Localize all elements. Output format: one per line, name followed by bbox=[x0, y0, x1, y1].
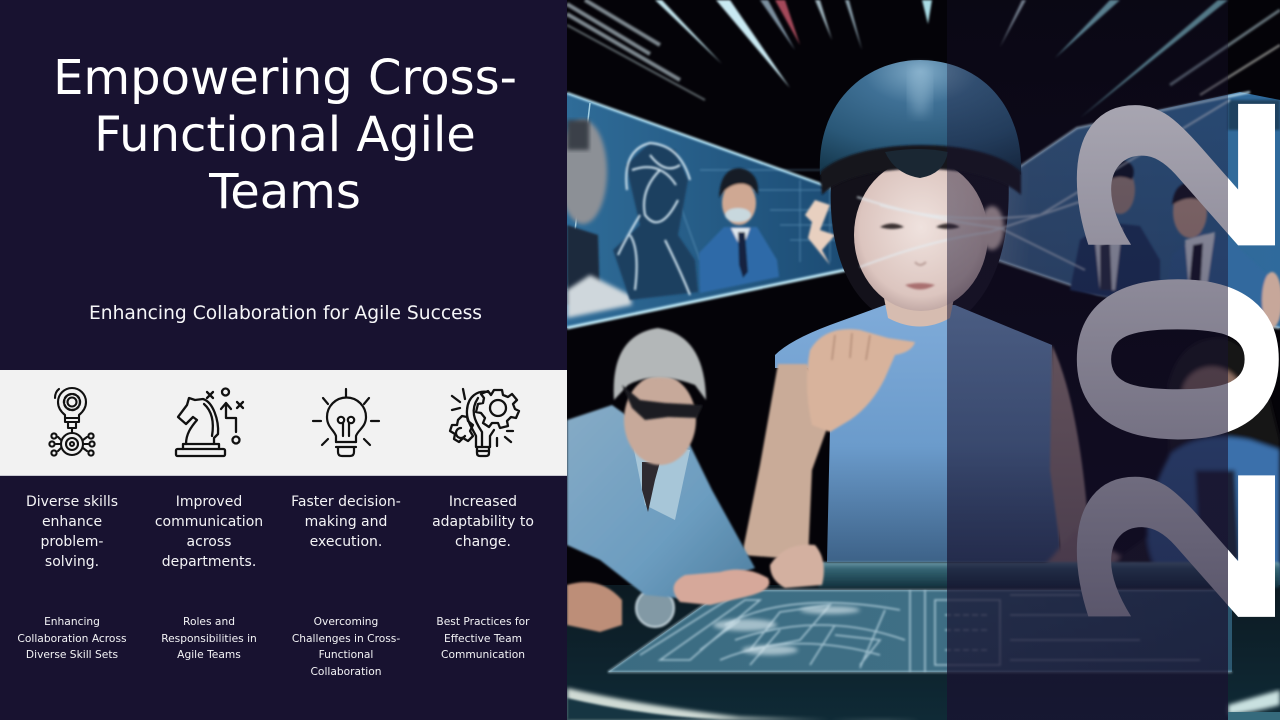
benefit text 1: problem- bbox=[40, 534, 103, 550]
benefit text 3 bbox=[291, 494, 401, 550]
topic text 2: Responsibilities in bbox=[161, 632, 257, 645]
topic text 4 bbox=[436, 615, 530, 661]
benefit text 1: solving. bbox=[45, 554, 99, 570]
topic text 1: Diverse Skill Sets bbox=[26, 648, 118, 661]
topic text 1 bbox=[17, 615, 127, 661]
photo: futuristic team around a holographic table bbox=[567, 0, 1280, 720]
benefit text 3: Faster decision- bbox=[291, 494, 401, 510]
icon: bulb with gears bbox=[448, 388, 520, 458]
title: Functional Agile bbox=[94, 107, 476, 163]
topic text 1: Enhancing bbox=[44, 615, 100, 628]
icon: light bulb bbox=[312, 388, 380, 458]
benefit text 2 bbox=[155, 494, 263, 570]
benefit text 2: communication bbox=[155, 514, 263, 530]
topic text 3 bbox=[292, 615, 400, 678]
hologram figure in suit bbox=[699, 168, 835, 293]
topic text 3: Challenges in Cross- bbox=[292, 632, 400, 645]
title bbox=[53, 50, 517, 220]
topic text 1: Collaboration Across bbox=[17, 632, 127, 645]
topic text 2: Roles and bbox=[183, 615, 235, 628]
icon: chess knight strategy bbox=[174, 387, 244, 458]
icon: bulb with gear and circuit bbox=[48, 387, 96, 457]
benefit text 3: execution. bbox=[310, 534, 382, 550]
topic text 3: Overcoming bbox=[314, 615, 378, 628]
holographic table bbox=[567, 562, 1280, 720]
benefit text 1: Diverse skills bbox=[26, 494, 118, 510]
panel: left content bbox=[0, 0, 567, 720]
topic text 3: Collaboration bbox=[310, 665, 382, 678]
topic text 4: Effective Team bbox=[444, 632, 522, 645]
topic text 2: Agile Teams bbox=[177, 648, 241, 661]
left hologram panel bbox=[559, 93, 860, 328]
title: Empowering Cross- bbox=[53, 50, 517, 106]
benefit text 4: change. bbox=[455, 534, 511, 550]
person: seated colleague on the right bbox=[1045, 338, 1280, 690]
benefit text 2: departments. bbox=[162, 554, 256, 570]
icon band bbox=[0, 370, 567, 476]
subtitle: Enhancing Collaboration for Agile Success bbox=[89, 303, 482, 324]
person: older man leaning over the table bbox=[567, 328, 824, 632]
benefit text 4 bbox=[432, 494, 534, 550]
benefit text 1: enhance bbox=[42, 514, 102, 530]
benefit text 2: across bbox=[187, 534, 231, 550]
benefit text 2: Improved bbox=[176, 494, 242, 510]
benefit text 4: Increased bbox=[449, 494, 517, 510]
topic text 2 bbox=[161, 615, 257, 661]
topic text 4: Communication bbox=[441, 648, 525, 661]
topic text 3: Functional bbox=[319, 648, 373, 661]
title: Teams bbox=[209, 164, 361, 220]
benefit text 3: making and bbox=[305, 514, 387, 530]
benefit text 4: adaptability to bbox=[432, 514, 534, 530]
benefit text 1 bbox=[26, 494, 118, 570]
topic text 4: Best Practices for bbox=[436, 615, 530, 628]
right hologram panel bbox=[947, 92, 1280, 328]
translucent navy overlay strip bbox=[947, 0, 1228, 720]
person: woman with helmet bbox=[742, 60, 1230, 562]
